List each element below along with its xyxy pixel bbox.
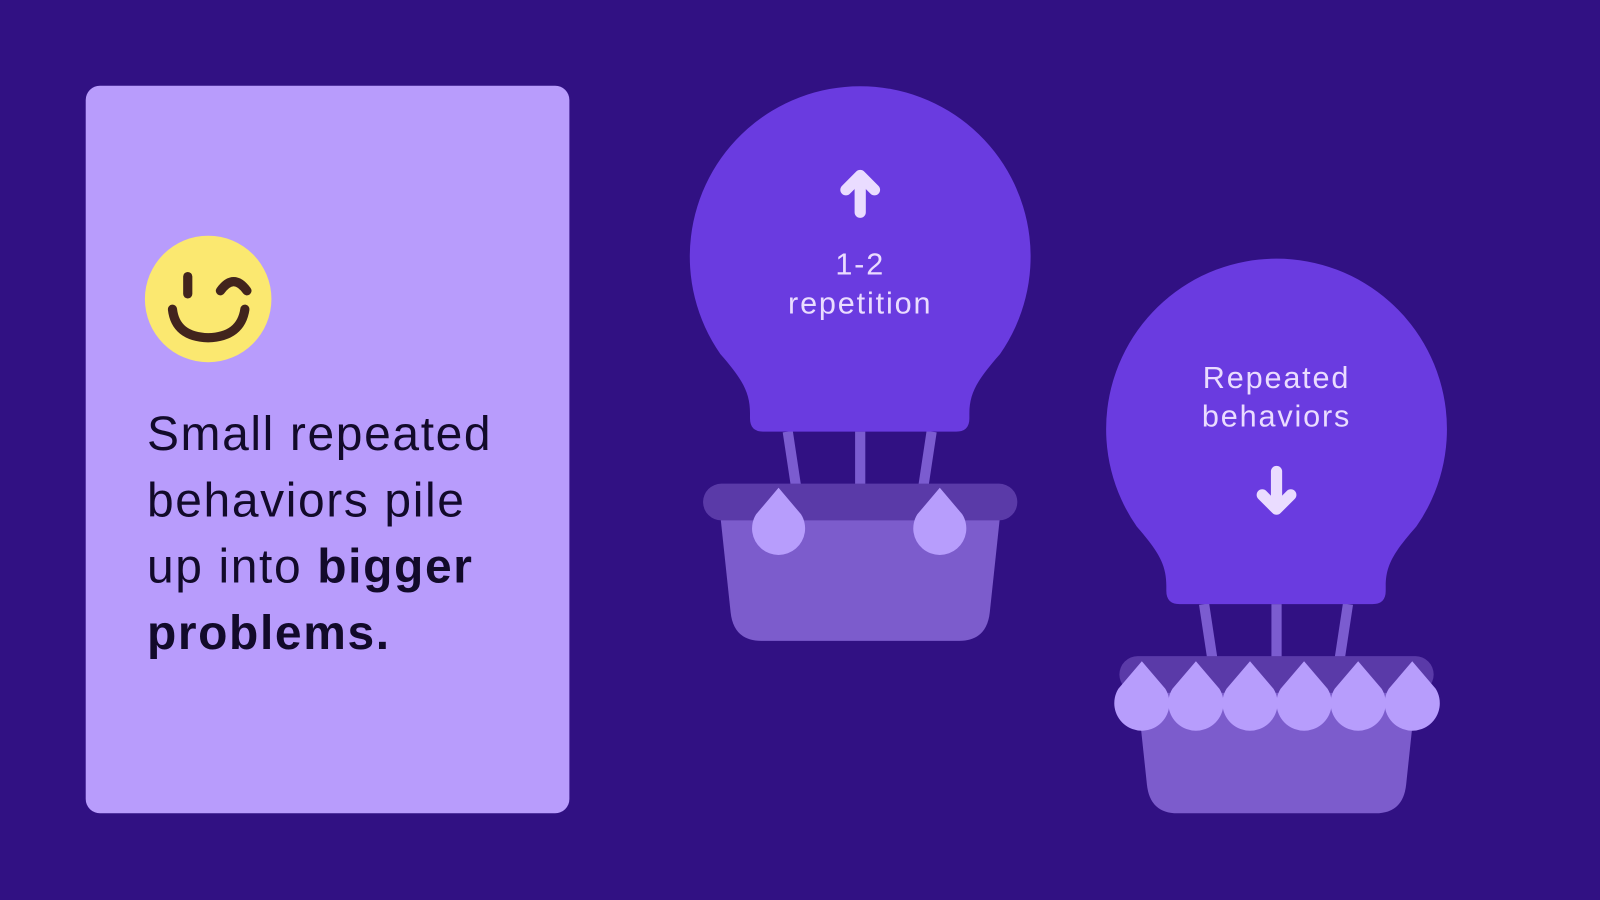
label: 1-2 repetition: 1-2 <box>835 247 885 281</box>
label: Repeated behaviors: Repeated <box>1203 361 1350 395</box>
label: Repeated behaviors: behaviors <box>1202 400 1351 434</box>
balloon: repeated behaviors <box>1106 259 1447 813</box>
icon: down arrow <box>1262 471 1291 509</box>
label: 1-2 repetition: repetition <box>788 286 932 320</box>
text block: main message: up into bigger <box>147 541 474 594</box>
text block: main message: Small repeated <box>147 408 492 461</box>
balloon: 1-2 repetition <box>690 86 1031 641</box>
icon: drops <box>752 488 966 555</box>
icon: up arrow <box>846 176 874 212</box>
icon: winking emoji <box>145 236 271 362</box>
icon: six drops <box>1114 661 1440 731</box>
text block: main message: behaviors pile <box>147 474 466 527</box>
text block: main message: problems. <box>147 607 391 660</box>
panel: message card <box>86 86 569 813</box>
